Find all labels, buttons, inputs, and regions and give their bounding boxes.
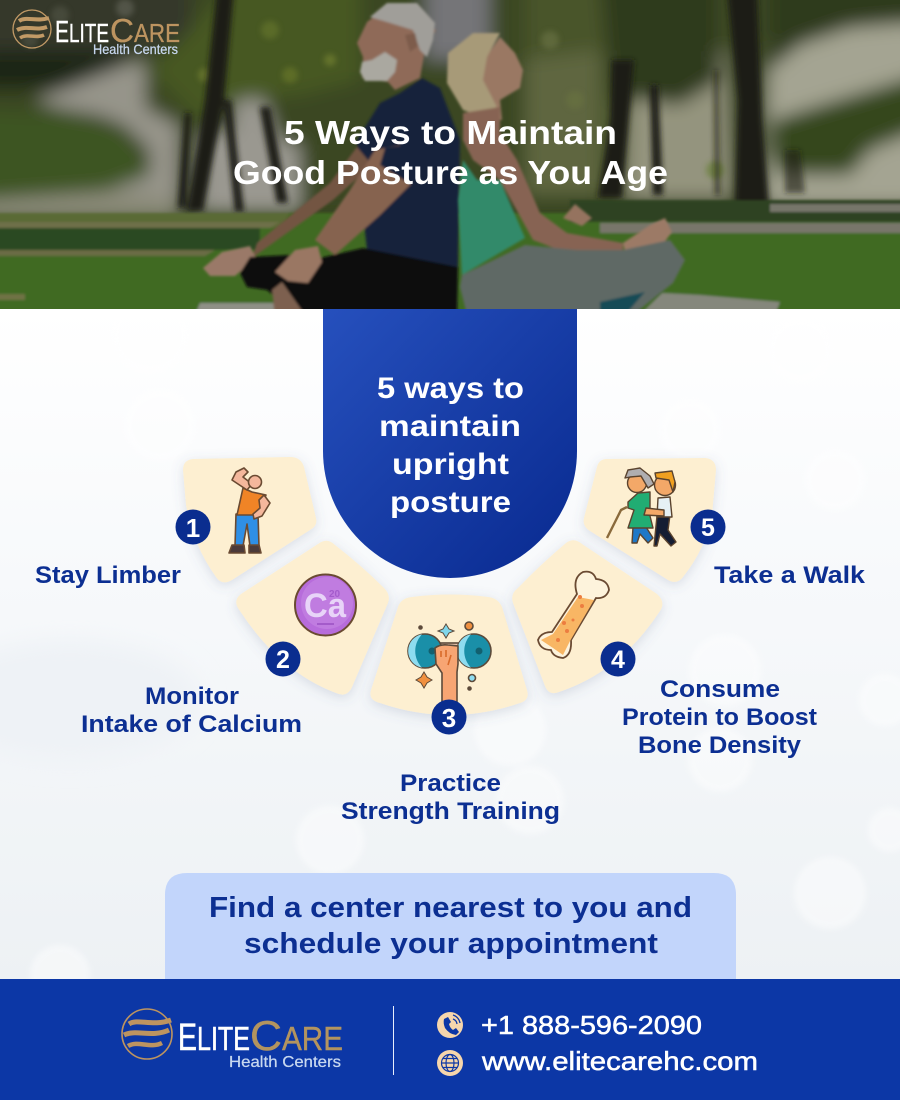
card 1 xyxy=(183,457,316,582)
label: consume protein: Consume xyxy=(660,676,780,703)
label: practice strength training: Practice xyxy=(400,770,501,797)
photo background: lawn and paths xyxy=(0,200,900,320)
panel 2: calcium xyxy=(81,541,389,738)
central heading panel: 5 ways to xyxy=(377,372,524,405)
footer logo: ARE xyxy=(282,1020,343,1057)
label: monitor intake of calcium: Intake of Calcium xyxy=(81,711,302,738)
icon: globe xyxy=(437,1050,463,1076)
footer divider xyxy=(393,1006,394,1075)
title: 5 Ways to Maintain xyxy=(284,114,617,151)
panel 4: protein and bone density: 4 xyxy=(611,646,625,674)
footer logo: LITE xyxy=(197,1020,250,1057)
man xyxy=(203,3,460,315)
header logo xyxy=(13,10,180,57)
label: take a walk: Take a Walk xyxy=(714,562,866,589)
label: monitor intake of calcium: Monitor xyxy=(145,683,239,710)
header logo: Health Centers xyxy=(93,41,178,57)
panel 1: stay limber: 1 xyxy=(186,513,200,543)
card 5 xyxy=(584,458,716,582)
logo wordmark: E xyxy=(55,14,69,49)
header photo: couple meditating in a park xyxy=(0,0,900,320)
card 2 xyxy=(236,541,389,695)
website: www.elitecarehc.com xyxy=(481,1046,758,1076)
icon: calcium coin xyxy=(295,574,356,636)
number badge 5 xyxy=(690,510,726,544)
logo wordmark: LITE xyxy=(69,18,109,48)
number badge 2 xyxy=(266,642,300,676)
logo emblem xyxy=(13,10,51,48)
call to action box: Find a center nearest to you and xyxy=(209,892,692,924)
footer logo: C xyxy=(250,1012,282,1059)
title xyxy=(233,114,668,191)
panel 3: strength training xyxy=(341,594,560,825)
icon: calcium coin: 20 xyxy=(329,589,341,600)
central heading panel xyxy=(323,309,577,578)
woman xyxy=(447,33,685,315)
panel 5: take a walk xyxy=(584,458,866,589)
central heading panel: upright xyxy=(392,448,509,481)
panel 2: calcium: 2 xyxy=(276,646,290,674)
label: practice strength training: Strength Training xyxy=(341,798,560,825)
central heading panel: maintain xyxy=(379,410,521,443)
call to action box: schedule your appointment xyxy=(244,928,658,960)
label: consume protein: Bone Density xyxy=(638,732,802,759)
footer band xyxy=(0,979,900,1100)
footer logo: E xyxy=(178,1017,197,1059)
header logo: C xyxy=(110,12,134,49)
icon: stretching person xyxy=(229,468,270,553)
icon: calcium coin: Ca xyxy=(304,587,347,625)
header logo: ARE xyxy=(134,18,180,48)
photo background: tree trunks xyxy=(178,0,805,212)
label: consume protein xyxy=(622,676,817,759)
call to action box xyxy=(165,873,736,979)
label: monitor intake of calcium xyxy=(81,683,302,738)
central heading panel: posture xyxy=(390,486,511,519)
icon: phone xyxy=(437,1012,463,1038)
panel 3: strength training: 3 xyxy=(442,703,456,733)
card 3 xyxy=(370,594,528,715)
phone number: +1 888-596-2090 xyxy=(481,1010,702,1040)
icon: bone xyxy=(538,572,609,658)
panel 5: take a walk: 5 xyxy=(701,514,715,542)
footer logo xyxy=(122,1009,343,1071)
icon: elderly couple walking xyxy=(607,468,676,546)
label: consume protein: Protein to Boost xyxy=(622,704,817,731)
number badge 3 xyxy=(432,700,466,734)
panel 4: protein and bone density xyxy=(512,540,817,759)
photo background: foliage and pale gaps xyxy=(0,0,900,220)
number badge 4 xyxy=(600,642,636,676)
title: Good Posture as You Age xyxy=(233,154,668,191)
panel 1: stay limber xyxy=(35,457,316,589)
photo background: leaf highlights xyxy=(22,0,724,179)
footer logo: Health Centers xyxy=(229,1054,341,1071)
card 4 xyxy=(512,540,662,693)
number badge 1 xyxy=(176,510,210,544)
label: stay limber: Stay Limber xyxy=(35,562,181,589)
page background with bokeh xyxy=(0,297,900,1005)
icon: dumbbell in fist xyxy=(408,622,491,702)
label: practice strength training xyxy=(341,770,560,825)
